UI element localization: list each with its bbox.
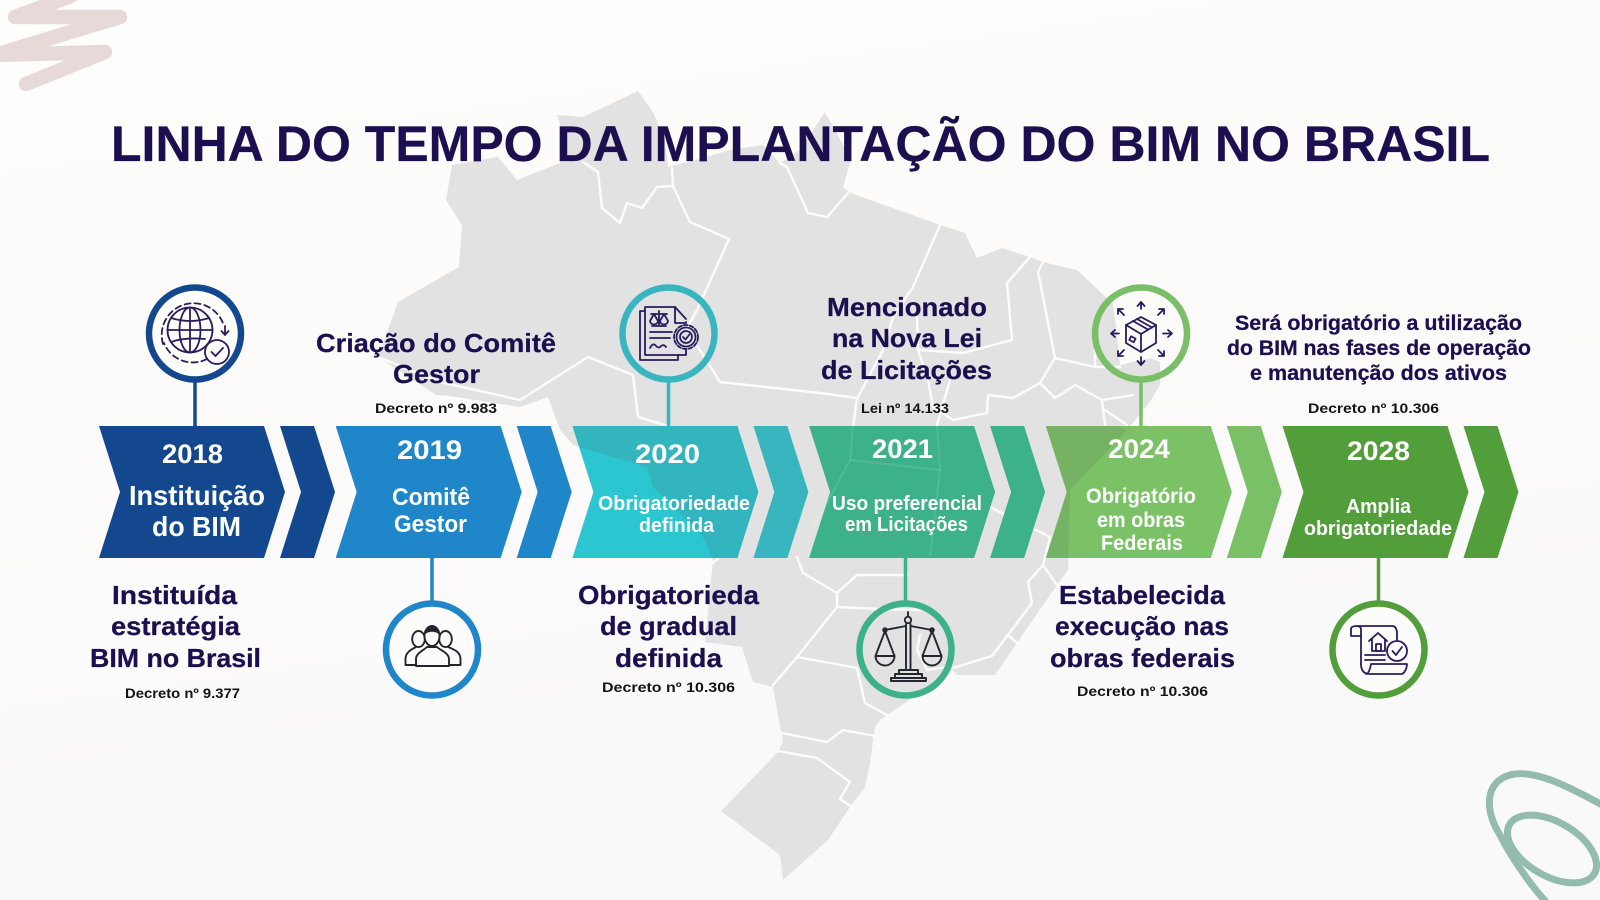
- chevron label: 2024: Federais: [1101, 532, 1183, 555]
- text block: 2020 description: [578, 580, 760, 695]
- text block: 2024 description: execução nas: [1055, 611, 1229, 641]
- chevron label: 2020: Obrigatoriedade: [598, 493, 750, 515]
- text block: 2019 description: Gestor: [393, 359, 480, 389]
- text block: 2024 description: [1050, 580, 1235, 699]
- text block: 2018 description: Instituída: [112, 580, 238, 610]
- icon: legal document with gear, 2020: [622, 288, 714, 380]
- chevron arrows timeline: [99, 426, 1518, 558]
- title: LINHA DO TEMPO DA IMPLANTAÇÃO DO BIM NO BRASIL: [111, 116, 1490, 172]
- text block: 2020 description: de gradual: [600, 611, 737, 641]
- chevron label: 2028: 2028: [1347, 436, 1410, 466]
- text block: 2019 description: Criação do Comitê: [316, 328, 556, 358]
- chevron label: 2021: em Licitações: [845, 514, 968, 536]
- text block: 2018 description: Decreto nº 9.377: [125, 685, 240, 701]
- text block: 2020 description: definida: [615, 643, 723, 673]
- chevron label: 2019: Gestor: [394, 511, 467, 538]
- chevron label: 2024: em obras: [1097, 509, 1185, 532]
- chevron label: 2019: Comitê: [392, 484, 470, 511]
- connector stems: [195, 380, 1378, 603]
- text block: 2028 description: Decreto nº 10.306: [1308, 400, 1439, 416]
- icon: globe with check, 2018: [149, 288, 241, 380]
- chevron label: 2028: [1304, 436, 1452, 540]
- chevron label: 2028: Amplia: [1346, 496, 1412, 518]
- chevron label: 2018: do BIM: [152, 511, 241, 542]
- chevron label: 2018: 2018: [162, 439, 223, 469]
- chevron label: 2020: [598, 439, 750, 537]
- chevron label: 2018: [129, 439, 265, 542]
- chevron 2019: [336, 426, 572, 558]
- icon: property scroll with check, 2028: [1332, 604, 1424, 696]
- text block: 2019 description: Decreto nº 9.983: [375, 400, 497, 416]
- background map of Brazil: [378, 91, 1160, 880]
- text block: 2028 description: e manutenção dos ativos: [1250, 362, 1507, 385]
- chevron 2020: [572, 426, 808, 558]
- text block: 2021 description: na Nova Lei: [832, 323, 982, 353]
- icon: people group, 2019: [386, 604, 478, 696]
- chevron 2028: [1282, 426, 1518, 558]
- text block: 2021 description: de Licitações: [821, 355, 992, 385]
- chevron label: 2019: [392, 435, 470, 538]
- decoration: pink brush stroke: [0, 0, 120, 84]
- text block: 2028 description: [1227, 312, 1531, 416]
- text block: 2024 description: obras federais: [1050, 643, 1235, 673]
- text block: 2021 description: Lei nº 14.133: [861, 400, 949, 416]
- text block: 2028 description: do BIM nas fases de operação: [1227, 337, 1531, 360]
- text block: 2021 description: Mencionado: [827, 292, 987, 322]
- chevron label: 2021: Uso preferencial: [832, 493, 982, 515]
- chevron 2021: [809, 426, 1045, 558]
- map tint showing through chevrons: [572, 426, 1127, 558]
- text block: 2020 description: Decreto nº 10.306: [602, 679, 735, 695]
- chevron 2018: [99, 426, 335, 558]
- chevron 2024: [1046, 426, 1282, 558]
- chevron label: 2024: Obrigatório: [1086, 485, 1196, 508]
- chevron label: 2018: Instituição: [129, 480, 265, 511]
- text block: 2024 description: Decreto nº 10.306: [1077, 683, 1208, 699]
- text block: 2018 description: estratégia: [111, 611, 241, 641]
- chevron label: 2024: [1086, 434, 1196, 555]
- text block: 2018 description: [90, 580, 261, 701]
- icon: box with arrows, 2024: [1095, 288, 1187, 380]
- chevron label: 2020: 2020: [635, 439, 700, 469]
- chevron label: 2020: definida: [639, 515, 715, 537]
- text block: 2018 description: BIM no Brasil: [90, 643, 261, 673]
- chevron label: 2021: [832, 434, 982, 536]
- text block: 2028 description: Será obrigatório a utilização: [1235, 312, 1522, 335]
- text block: 2019 description: [316, 328, 556, 416]
- chevron label: 2019: 2019: [397, 435, 462, 465]
- chevron label: 2024: 2024: [1108, 434, 1170, 464]
- chevron label: 2021: 2021: [872, 434, 933, 464]
- icon: scales of justice, 2021: [860, 604, 952, 696]
- state borders faintly visible through chevrons: [800, 425, 940, 556]
- decoration: green loops: [1489, 774, 1600, 900]
- text block: 2021 description: [821, 292, 992, 416]
- text block: 2020 description: Obrigatorieda: [578, 580, 760, 610]
- chevron label: 2028: obrigatoriedade: [1304, 518, 1452, 540]
- text block: 2024 description: Estabelecida: [1059, 580, 1226, 610]
